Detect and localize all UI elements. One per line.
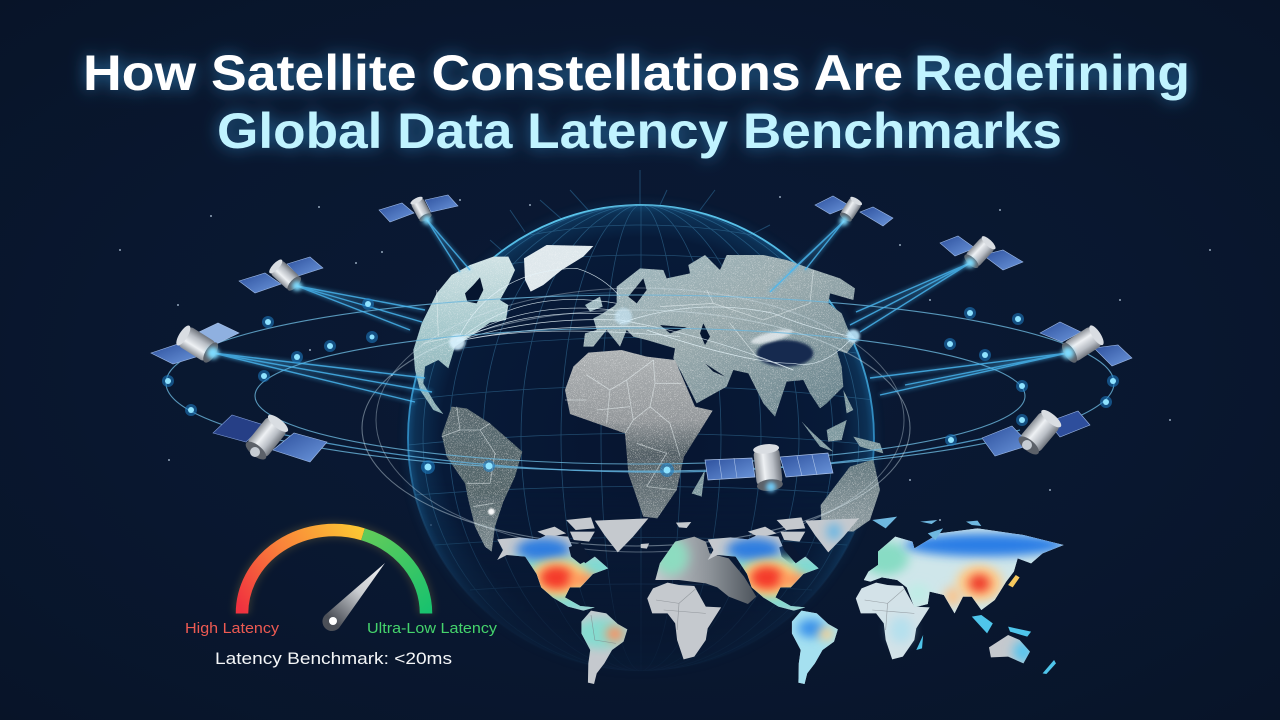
australia bbox=[821, 459, 880, 532]
gauge green arc bbox=[363, 534, 426, 614]
satellite front centre bbox=[705, 443, 833, 492]
title line two: Global Data Latency Benchmarks bbox=[217, 103, 1062, 159]
ultra-low latency label: Ultra-Low Latency bbox=[367, 620, 498, 637]
orbit nodes bbox=[162, 298, 1119, 477]
continents bbox=[413, 245, 883, 552]
north america bbox=[413, 257, 515, 414]
white ring two bbox=[376, 288, 904, 552]
arctic islands bbox=[872, 517, 981, 540]
inner orbit bbox=[255, 328, 1025, 464]
globe bbox=[404, 170, 883, 675]
africa tint bbox=[889, 617, 912, 643]
regional latency heatmaps bbox=[497, 517, 1069, 687]
gauge needle bbox=[322, 563, 385, 631]
city light south america bbox=[488, 508, 495, 515]
high latency label: High Latency bbox=[185, 620, 280, 637]
gauge glow bbox=[242, 530, 426, 614]
node cores bbox=[165, 301, 1116, 474]
britain bbox=[585, 297, 603, 312]
cloud streak bbox=[750, 327, 794, 347]
satellite upper left bbox=[239, 257, 323, 293]
title line one white: How Satellite Constellations Are bbox=[83, 45, 903, 101]
africa bbox=[565, 350, 713, 518]
satellite lower left bbox=[213, 412, 327, 463]
greenland heat bbox=[828, 523, 840, 540]
starfield bbox=[119, 196, 1211, 526]
country borders bbox=[423, 270, 813, 507]
laser beams bbox=[213, 220, 1068, 402]
heatmap west base land bbox=[497, 517, 721, 684]
glow rays above globe bbox=[490, 170, 770, 262]
australia heat bbox=[1013, 640, 1033, 663]
south america heat one bbox=[574, 618, 627, 648]
south america heat two bbox=[792, 610, 838, 684]
greenland bbox=[524, 245, 593, 292]
white ring one bbox=[362, 310, 910, 546]
title bbox=[83, 45, 1190, 159]
city light new york bbox=[449, 334, 465, 350]
heatmap centre base land bbox=[708, 517, 1064, 684]
europe and dark asia shading bbox=[654, 537, 756, 604]
satellite right bbox=[1040, 322, 1132, 366]
hudson bay gaps bbox=[569, 543, 801, 564]
japan and asia islands bbox=[1008, 575, 1020, 587]
infographic canvas bbox=[74, 40, 1211, 684]
data arcs bbox=[457, 268, 853, 370]
title line one accent: Redefining bbox=[914, 45, 1190, 101]
benchmark label: Latency Benchmark: <20ms bbox=[215, 649, 452, 668]
latency gauge bbox=[185, 530, 498, 668]
orbital rings bbox=[166, 288, 1114, 552]
satellite upper right bbox=[940, 234, 1023, 270]
seas and lakes bbox=[465, 277, 725, 377]
southeast asia islands bbox=[692, 390, 883, 497]
satellite top left bbox=[379, 195, 458, 224]
satellite lower right bbox=[982, 407, 1090, 458]
north america heat one bbox=[514, 538, 614, 610]
north america heat two bbox=[725, 538, 824, 610]
satellite left bbox=[151, 323, 239, 365]
city light east asia bbox=[847, 329, 860, 343]
map borders bbox=[591, 588, 914, 643]
outer orbit bbox=[166, 295, 1114, 471]
node halos bbox=[162, 298, 1119, 477]
tibet shadow bbox=[757, 340, 813, 367]
gauge warm arc bbox=[242, 530, 363, 614]
eurasia bbox=[583, 255, 857, 417]
graticule bbox=[408, 205, 874, 671]
city light europe bbox=[615, 308, 632, 325]
eurasia heat bbox=[864, 528, 1064, 614]
satellite top right bbox=[815, 195, 893, 226]
front orbit bbox=[262, 430, 1020, 472]
globe sphere bbox=[404, 201, 878, 675]
south america bbox=[442, 407, 522, 552]
